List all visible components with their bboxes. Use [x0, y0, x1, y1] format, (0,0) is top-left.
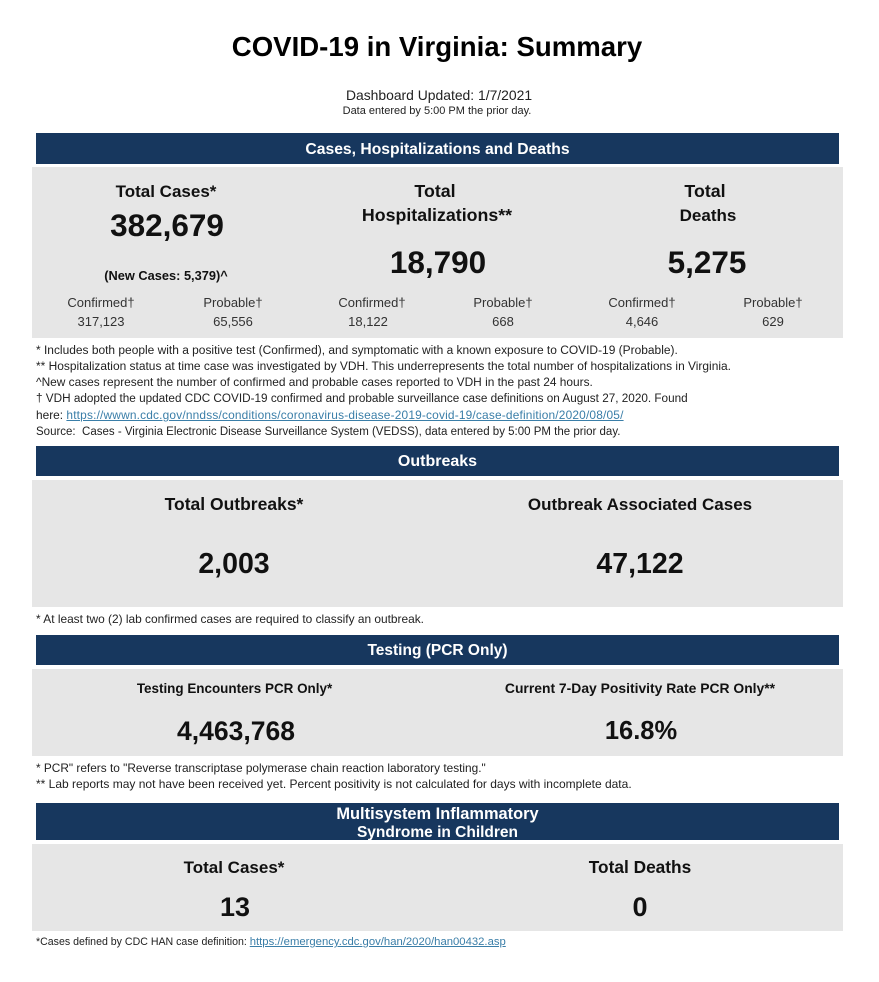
footnote: MIS-C: *Cases defined by CDC HAN case definition: https://emergency.cdc.gov/han/2020/han00432.asp: [36, 936, 506, 948]
footnote: outbreaks: * At least two (2) lab confirmed cases are required to classify an outbreak.: [36, 612, 424, 626]
title: COVID-19 in Virginia: Summary: [232, 31, 642, 62]
footnotes: cases: ^New cases represent the number of confirmed and probable cases reported to VDH in the past 24 hours.: [36, 375, 593, 389]
outbreak cases value: 47,122: [596, 548, 684, 580]
probable hosp label: Probable†: [473, 295, 533, 310]
header: cases: Cases, Hospitalizations and Deaths: [305, 141, 570, 158]
footnotes: cases: † VDH adopted the updated CDC COVID-19 confirmed and probable surveillance case definitions on August 27, 2020. Found: [36, 392, 688, 405]
header: outbreaks: Outbreaks: [398, 453, 477, 470]
header: MIS-C: [36, 803, 839, 840]
footnotes: cases: ** Hospitalization status at time case was investigated by VDH. This underrepresents the total number of hospitalizations in Virginia.: [36, 359, 731, 373]
MIS-C cases value: 13: [220, 892, 250, 922]
testing encounters heading: Testing Encounters PCR Only*: [137, 681, 332, 696]
header: cases: [36, 133, 839, 164]
total outbreaks value: 2,003: [198, 548, 270, 580]
footnotes: testing: [36, 761, 632, 791]
panel: MIS-C: [32, 844, 843, 931]
update date: Dashboard Updated: 1/7/2021: [346, 87, 532, 103]
testing encounters value: 4,463,768: [177, 716, 295, 746]
hospitalizations heading: Total: [414, 181, 456, 201]
confirmed cases label: Confirmed†: [67, 295, 135, 310]
probable deaths: 629: [762, 314, 784, 329]
panel: outbreaks: [32, 480, 843, 607]
header: MIS-C: Syndrome in Children: [357, 824, 518, 841]
header: testing: Testing (PCR Only): [367, 642, 508, 659]
confirmed hosp: 18,122: [348, 314, 388, 329]
new cases: (New Cases: 5,379)^: [104, 268, 228, 283]
MIS-C deaths heading: Total Deaths: [589, 857, 691, 877]
probable hosp: 668: [492, 314, 514, 329]
footnotes: cases: here: https://wwwn.cdc.gov/nndss/conditions/coronavirus-disease-2019-covid-19/case-definition/2020/08/05/: [36, 408, 624, 422]
footnotes: testing: ** Lab reports may not have been received yet. Percent positivity is not calculated for days with incomplete data.: [36, 777, 632, 791]
footnotes: cases: * Includes both people with a positive test (Confirmed), and symptomatic with a known exposure to COVID-19 (Probable).: [36, 343, 678, 357]
MIS-C deaths value: 0: [632, 892, 648, 922]
total cases heading: Total Cases*: [116, 182, 216, 201]
positivity heading: Current 7-Day Positivity Rate PCR Only**: [505, 680, 775, 696]
footnotes: cases: [36, 343, 731, 438]
deaths value: 5,275: [668, 244, 746, 280]
probable deaths label: Probable†: [743, 295, 803, 310]
deaths heading line 2: Deaths: [680, 206, 736, 225]
probable cases: 65,556: [213, 314, 253, 329]
confirmed deaths: 4,646: [626, 314, 658, 329]
panel: testing: [32, 669, 843, 756]
confirmed deaths label: Confirmed†: [608, 295, 676, 310]
footnotes: cases: Source: Cases - Virginia Electronic Disease Surveillance System (VEDSS), data entered by 5:00 PM the prior day.: [36, 426, 620, 438]
probable cases label: Probable†: [203, 295, 263, 310]
panel: cases: [32, 167, 843, 338]
confirmed cases: 317,123: [78, 314, 124, 329]
footnotes: testing: * PCR" refers to "Reverse transcriptase polymerase chain reaction laboratory testing.": [36, 761, 486, 775]
header: MIS-C: Multisystem Inflammatory: [336, 805, 539, 823]
positivity value: 16.8%: [605, 717, 677, 745]
hospitalizations value: 18,790: [390, 244, 486, 280]
outbreak cases heading: Outbreak Associated Cases: [528, 495, 752, 514]
header: testing: [36, 635, 839, 665]
hospitalizations heading line 2: Hospitalizations**: [362, 205, 512, 225]
data entry note: Data entered by 5:00 PM the prior day.: [343, 104, 531, 116]
header: outbreaks: [36, 446, 839, 476]
MIS-C cases heading: Total Cases*: [184, 858, 284, 877]
total cases value: 382,679: [110, 207, 224, 243]
total outbreaks heading: Total Outbreaks*: [165, 494, 303, 514]
deaths heading: Total: [684, 181, 726, 201]
confirmed hosp label: Confirmed†: [338, 295, 406, 310]
